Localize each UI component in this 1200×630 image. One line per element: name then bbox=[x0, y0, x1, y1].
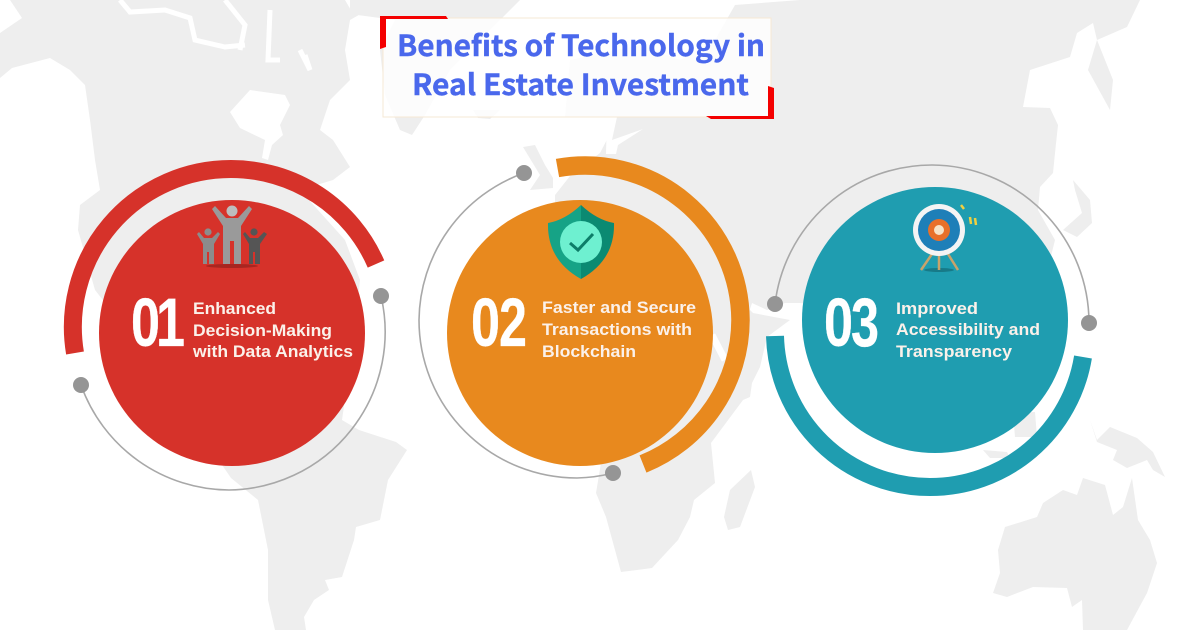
number 02: 2 bbox=[499, 284, 527, 361]
disc bbox=[447, 200, 713, 466]
icon: shield bbox=[548, 205, 614, 279]
panel: 02 blockchain bbox=[419, 165, 740, 481]
label text: Transactions with bbox=[542, 321, 692, 339]
ring dot top bbox=[516, 165, 532, 181]
label text: with Data Analytics bbox=[192, 343, 353, 361]
thin ring bbox=[775, 165, 1089, 323]
label text: Accessibility and bbox=[896, 321, 1040, 339]
panel: 01 decision-making bbox=[73, 169, 389, 490]
thick arc bbox=[73, 169, 376, 353]
ring dot left bbox=[767, 296, 783, 312]
disc bbox=[99, 200, 365, 466]
number 03: 0 bbox=[824, 284, 853, 361]
ring dot bottom bbox=[605, 465, 621, 481]
title corner bracket bottom-right bbox=[706, 86, 774, 119]
ring dot left bbox=[73, 377, 89, 393]
ring dot right bbox=[373, 288, 389, 304]
thick arc bbox=[558, 166, 740, 464]
number 03: 3 bbox=[851, 284, 879, 361]
label text: Transparency bbox=[896, 343, 1013, 361]
thick arc bbox=[775, 336, 1083, 487]
title block bbox=[380, 16, 774, 119]
ring dot right bbox=[1081, 315, 1097, 331]
thin ring bbox=[419, 173, 613, 478]
icon: people bbox=[197, 206, 267, 268]
label text: Enhanced bbox=[193, 300, 276, 318]
label text: Decision-Making bbox=[193, 322, 332, 340]
label text: Faster and Secure bbox=[542, 299, 696, 317]
title corner bracket top-left bbox=[380, 16, 448, 49]
label text: Blockchain bbox=[542, 343, 636, 361]
number 02: 0 bbox=[471, 284, 500, 361]
number 01: 1 bbox=[156, 284, 185, 361]
panel: 03 transparency bbox=[767, 165, 1097, 487]
thin ring bbox=[81, 296, 385, 490]
title text: Benefits of Technology in bbox=[397, 23, 765, 65]
number 01: 0 bbox=[131, 284, 160, 361]
icon: target bbox=[913, 204, 976, 272]
disc bbox=[802, 187, 1068, 453]
title text: Real Estate Investment bbox=[412, 62, 749, 104]
label text: Improved bbox=[896, 300, 978, 318]
